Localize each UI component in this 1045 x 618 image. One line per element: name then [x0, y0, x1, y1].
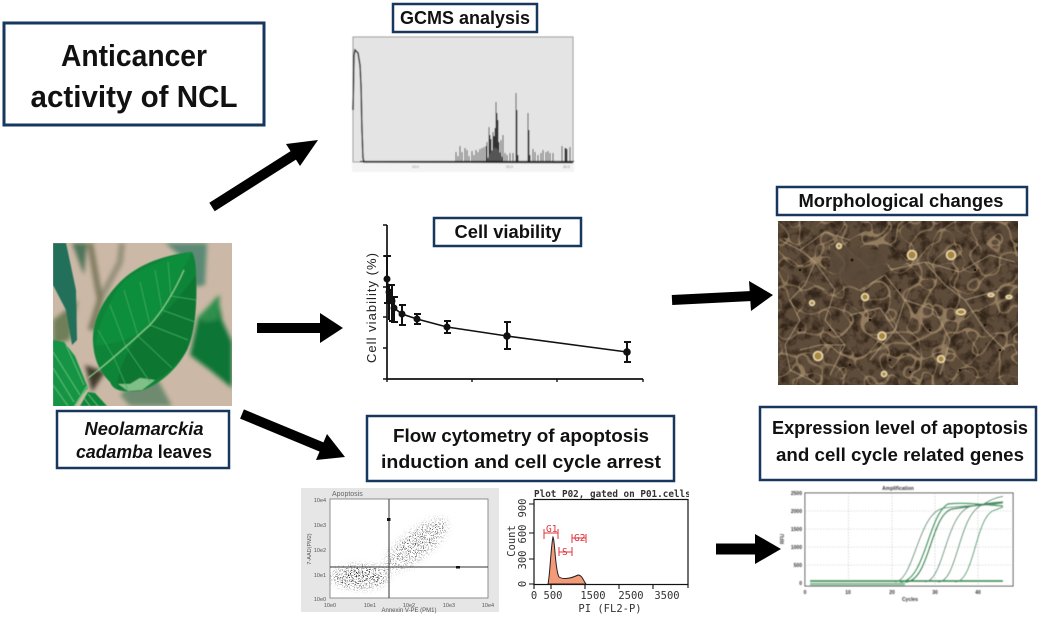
- chart: cell cycle histogram: G2: [574, 533, 585, 544]
- chart: cell cycle histogram: S: [562, 547, 568, 558]
- chart: cell cycle histogram: 3500: [654, 590, 680, 602]
- chart: cell cycle histogram: 600: [517, 525, 529, 543]
- top-left dark leaf edge: [53, 243, 77, 345]
- chart: GCMS chromatogram: 10.0: [412, 165, 419, 169]
- chart: apoptosis scatter plot: 10e4: [314, 498, 326, 504]
- chart: cell cycle histogram: Count: [506, 525, 518, 557]
- chart: apoptosis scatter plot: 10e0: [314, 597, 326, 603]
- chart: cell viability curve: [364, 225, 643, 382]
- heading: Expression level: [760, 407, 1036, 480]
- chart: qPCR amplification curves: 40: [975, 590, 981, 596]
- title box: Anticancer activity of NCL: Anticancer: [61, 38, 207, 73]
- y-axis label: Cell viability (%): [364, 253, 379, 363]
- arrow: flow cytometry to gene expression: [716, 534, 781, 564]
- chart: qPCR amplification curves: 500: [794, 563, 802, 569]
- chart: qPCR amplification curves: 30: [932, 590, 938, 596]
- chart: apoptosis scatter plot: 10e3: [443, 603, 455, 609]
- chart: GCMS chromatogram: 20.0: [506, 165, 513, 169]
- heading: Morphological changes: Morphological changes: [798, 191, 1004, 211]
- chart: GCMS chromatogram: 30.0: [563, 165, 570, 169]
- chart: apoptosis scatter plot: 10e1: [314, 573, 326, 579]
- label: Neolamarckia cadamba leaves: cadamba leaves: [76, 442, 212, 462]
- label: Neolamarckia cadamba leaves: Neolamarckia: [84, 419, 204, 439]
- photo: Neolamarckia cadamba leaf: [53, 243, 232, 407]
- chart: cell cycle histogram: 300: [517, 551, 529, 569]
- heading: Flow cytometry: induction and cell cycle arrest: [381, 452, 661, 472]
- arrow: leaf to cell viability: [257, 313, 343, 343]
- title box: Anticancer activity of NCL: activity of NCL: [30, 79, 238, 114]
- heading: Morphological changes: [777, 187, 1027, 215]
- chart: apoptosis scatter plot: [301, 488, 499, 614]
- chart: qPCR amplification curves: 0: [799, 581, 802, 587]
- lower-left leaf: [53, 340, 107, 407]
- chart: apoptosis scatter plot: 7-AAD(PM2): [307, 533, 313, 565]
- chart: qPCR amplification curves: 2000: [791, 509, 802, 515]
- heading: GCMS analysis: [393, 4, 537, 32]
- label: Neolamarckia cadamba leaves: [57, 411, 229, 468]
- heading: Cell viability: [434, 218, 581, 246]
- chart: apoptosis scatter plot: 10e1: [364, 603, 376, 609]
- arrow: leaf to GCMS: [212, 140, 318, 207]
- chart: cell cycle histogram: 0: [517, 581, 529, 587]
- chart: cell cycle histogram: 900: [517, 499, 529, 517]
- chart: apoptosis scatter plot: 10e2: [403, 603, 415, 609]
- chart: qPCR amplification curves: 1000: [791, 545, 802, 551]
- chart: qPCR amplification curves: 2500: [791, 491, 802, 497]
- blurred background foliage: [53, 243, 232, 406]
- rounded bright detached cells: [810, 244, 1012, 377]
- chart: apoptosis scatter plot: 10e0: [324, 603, 336, 609]
- chart: cell cycle histogram: G1: [546, 524, 558, 535]
- chart: apoptosis scatter plot: Apoptosis: [332, 491, 363, 498]
- chart: cell cycle histogram: 1500: [580, 590, 606, 602]
- chart: qPCR amplification curves: [780, 486, 1013, 603]
- chart: apoptosis scatter plot: 10e4: [482, 603, 494, 609]
- chart: qPCR amplification curves: 0: [804, 590, 807, 596]
- chart: qPCR amplification curves: 1500: [791, 527, 802, 533]
- heading: Cell viability: Cell viability: [454, 222, 562, 242]
- arrow: leaf to flow cytometry: [242, 414, 345, 460]
- chart: cell cycle histogram: 500: [544, 590, 562, 602]
- arrow: cell viability to morphology: [672, 281, 773, 311]
- main leaf: [88, 252, 196, 391]
- chart: cell cycle histogram: [506, 489, 691, 615]
- chart: qPCR amplification curves: 10: [845, 590, 851, 596]
- chart: apoptosis scatter plot: 10e3: [314, 523, 326, 529]
- chart: qPCR amplification curves: Amplification: [882, 486, 914, 492]
- heading: Flow cytometry: [367, 416, 674, 481]
- chart: cell cycle histogram: Plot P02, gated on P01.cells: [534, 489, 691, 500]
- heading: Expression level: and cell cycle related genes: [776, 445, 1024, 465]
- title box: Anticancer activity of NCL: [4, 23, 264, 125]
- photo: cell morphology micrograph: [778, 221, 1018, 385]
- heading: Expression level: Expression level of apoptosis: [772, 418, 1028, 438]
- chart: apoptosis scatter plot: 10e2: [314, 548, 326, 554]
- chart: cell cycle histogram: 2500: [618, 590, 644, 602]
- chart: apoptosis scatter plot: Annexin V-PE (PM1): [381, 608, 437, 614]
- chart: cell cycle histogram: PI (FL2-P): [578, 603, 642, 615]
- heading: GCMS analysis: GCMS analysis: [400, 8, 530, 28]
- chart: qPCR amplification curves: Cycles: [902, 597, 918, 603]
- heading: Flow cytometry: Flow cytometry of apoptosis: [393, 426, 649, 446]
- chart: GCMS chromatogram: [352, 36, 574, 172]
- chart: qPCR amplification curves: RFU: [780, 533, 786, 544]
- chart: qPCR amplification curves: 20: [889, 590, 895, 596]
- chart: cell cycle histogram: 0: [531, 590, 537, 602]
